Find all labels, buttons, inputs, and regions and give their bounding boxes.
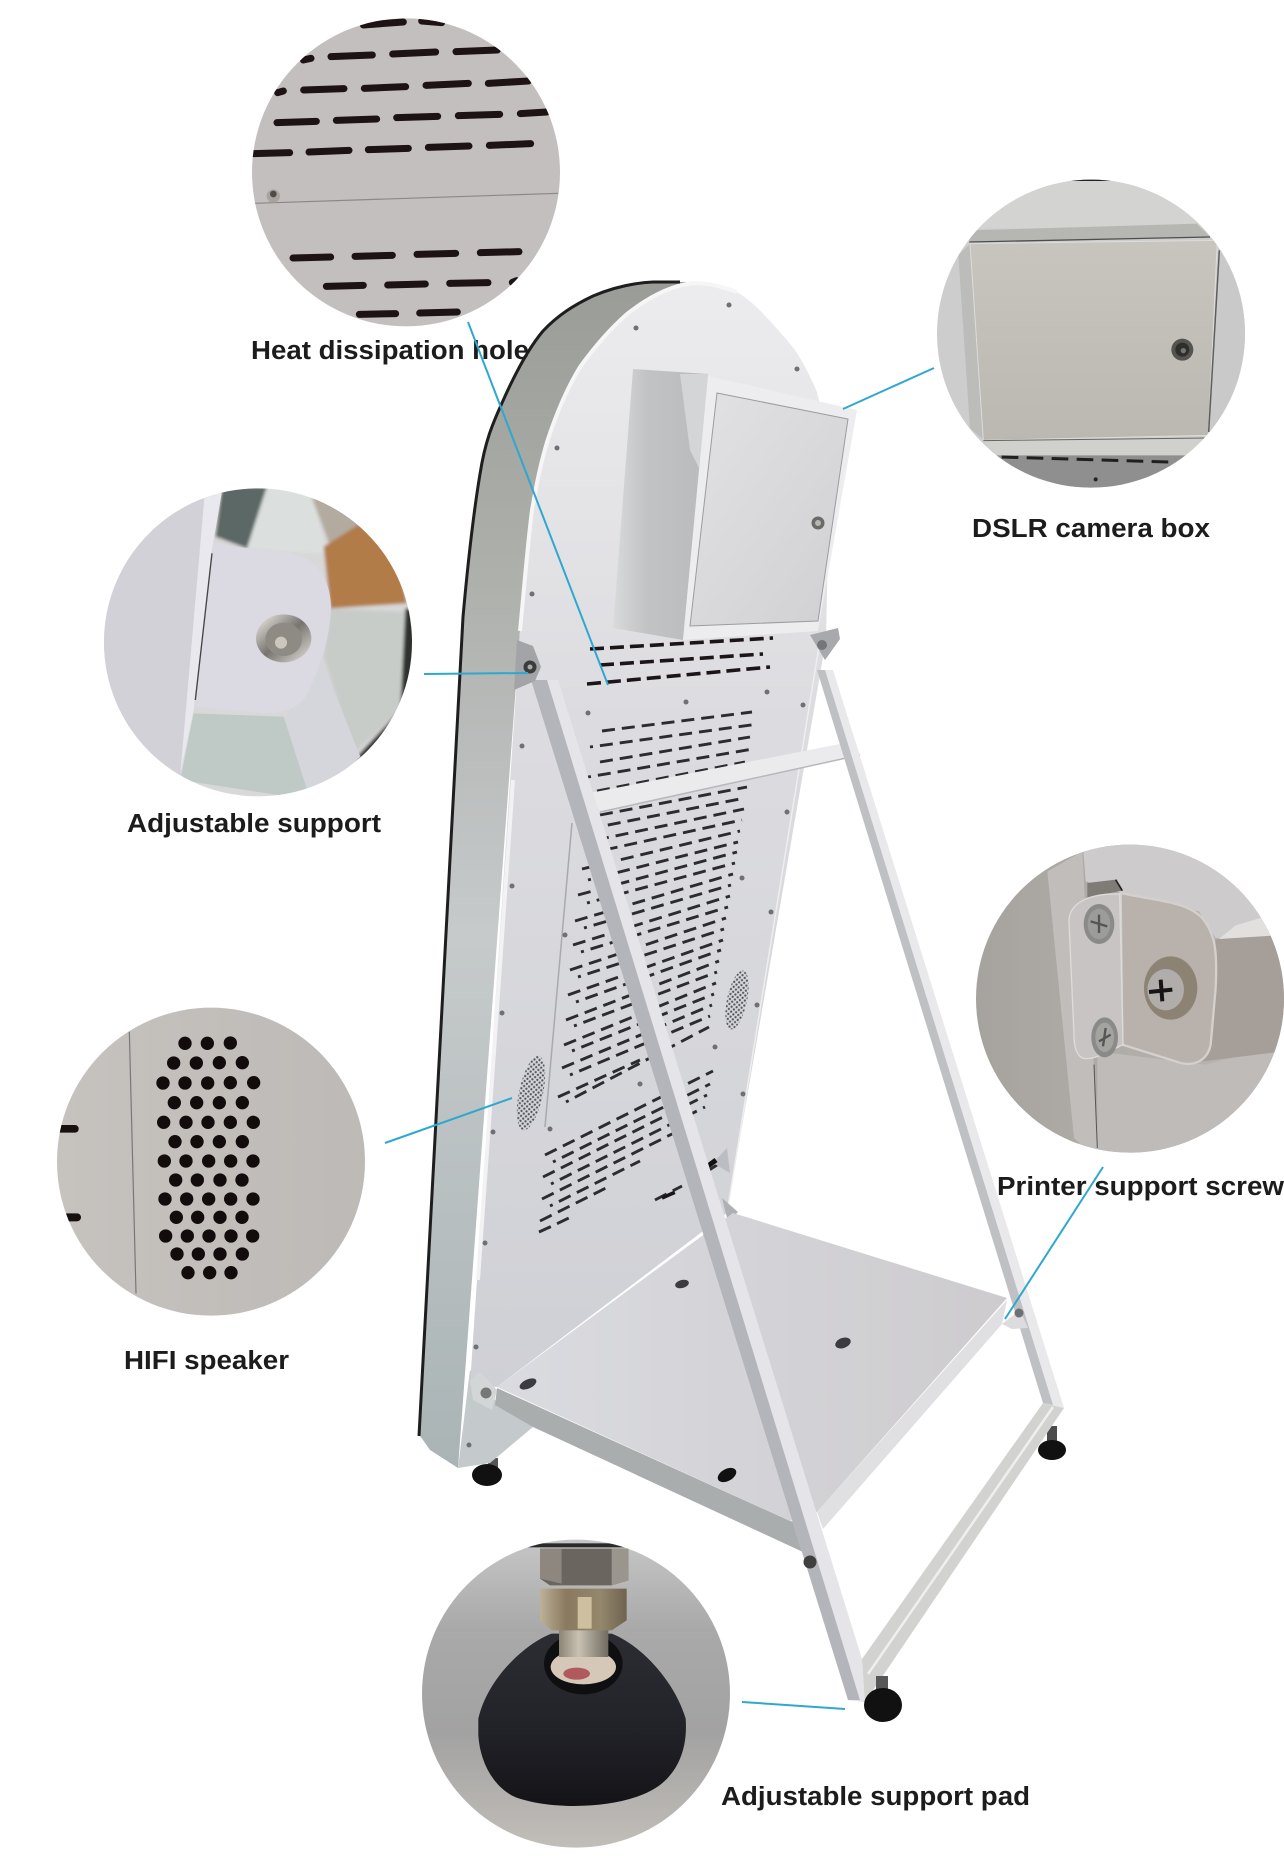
heat dissipation slots: top rows (587, 638, 773, 684)
detail circle: printer support screw (976, 844, 1284, 1153)
upper nut (540, 1549, 628, 1585)
panel screws (466, 302, 806, 1448)
box door (690, 393, 848, 626)
screw upper (1084, 904, 1114, 944)
callout line: printer support screw (1005, 1167, 1103, 1319)
bracket: upper left with screw (514, 640, 541, 690)
box side (613, 369, 708, 640)
product: arched photo booth stand (418, 282, 1066, 1722)
shelf mounting holes (674, 1278, 690, 1290)
speaker grille left (511, 1053, 551, 1133)
shelf (495, 1213, 1007, 1552)
main bracket (1121, 893, 1216, 1064)
screw: shelf front (804, 1556, 816, 1568)
door lock (1171, 339, 1193, 361)
lower panel with slots (996, 455, 1186, 488)
callout line: DSLR camera box (843, 368, 934, 409)
label: Adjustable support pad: Adjustable support pad (721, 1783, 1030, 1811)
callout line: HIFI speaker (385, 1098, 512, 1143)
left side strip (958, 244, 982, 438)
lower wall (1098, 1051, 1275, 1153)
rubber foot (478, 1634, 686, 1806)
lower reflection (180, 713, 310, 800)
DSLR camera box (613, 369, 857, 640)
label: HIFI speaker: HIFI speaker (124, 1347, 289, 1375)
foot: rear left (472, 1458, 502, 1486)
hex screw (256, 614, 311, 662)
rear face panel (470, 283, 830, 1387)
right side strip (1209, 250, 1245, 432)
left panel (97, 497, 204, 780)
detail circle: adjustable support (104, 488, 412, 796)
top frame band (969, 224, 1210, 242)
strut (307, 690, 360, 788)
screw main (1144, 956, 1197, 1020)
heat dissipation slots: lower block (539, 1071, 720, 1232)
bracket: upper right with screw (810, 628, 840, 660)
foot: front (864, 1676, 902, 1722)
callout line: heat dissipation hole (468, 322, 608, 685)
vertical plate (1069, 894, 1123, 1059)
label: Adjustable support: Adjustable support (127, 810, 382, 838)
bracket: lower left with screw (470, 1372, 497, 1410)
left frame strut (531, 680, 865, 1702)
panel screw (267, 189, 280, 203)
label: DSLR camera box: DSLR camera box (972, 515, 1210, 543)
detail circle: heat dissipation hole (252, 18, 560, 326)
bracket: shelf right with screw (1002, 1308, 1028, 1329)
shelf left edge band (495, 1388, 815, 1552)
notch (1087, 880, 1122, 897)
detail circle: HIFI speaker (57, 1008, 365, 1316)
upper wall (1084, 844, 1261, 938)
right frame strut (817, 670, 1064, 1408)
panel seam (129, 1032, 136, 1293)
detail circle: DSLR camera box (937, 180, 1245, 488)
seam line (1094, 1065, 1097, 1148)
heat dissipation slots: upper block (558, 712, 758, 1102)
label: Printer support screw: Printer support screw (997, 1173, 1284, 1201)
ball joint (550, 1656, 616, 1684)
crossbar (590, 741, 860, 812)
side panel of arched cabinet (418, 282, 693, 1468)
panel seam (255, 193, 558, 203)
top surface (978, 181, 1204, 228)
right side panel (1202, 926, 1284, 1061)
lower cut-out detail (708, 1148, 738, 1222)
speaker holes (156, 1036, 260, 1279)
soft photo background (104, 488, 412, 796)
hinge bracket (195, 542, 331, 713)
bottom frame (1186, 441, 1202, 455)
door (970, 240, 1217, 440)
front bottom bar (848, 1403, 1064, 1702)
screw lower (1091, 1017, 1118, 1057)
black front edge (419, 282, 680, 1436)
box front frame (683, 376, 857, 640)
shelf top surface (497, 1213, 1007, 1521)
foot: rear right (1038, 1426, 1066, 1460)
lower cabinet section below shelf (458, 1370, 533, 1468)
box lock (812, 516, 824, 530)
slot rows (253, 21, 547, 314)
callout line: adjustable support (424, 673, 528, 674)
detail circle: adjustable support pad (422, 1540, 730, 1848)
shelf right edge band (817, 1300, 1007, 1529)
side slots (60, 1125, 81, 1222)
speaker grille right (721, 969, 753, 1031)
callout line: adjustable support pad (742, 1702, 845, 1709)
vertical strip (1047, 851, 1099, 1163)
label: Heat dissipation hole: Heat dissipation hole (251, 337, 529, 365)
shaft (559, 1629, 608, 1657)
lower nut (540, 1589, 627, 1630)
